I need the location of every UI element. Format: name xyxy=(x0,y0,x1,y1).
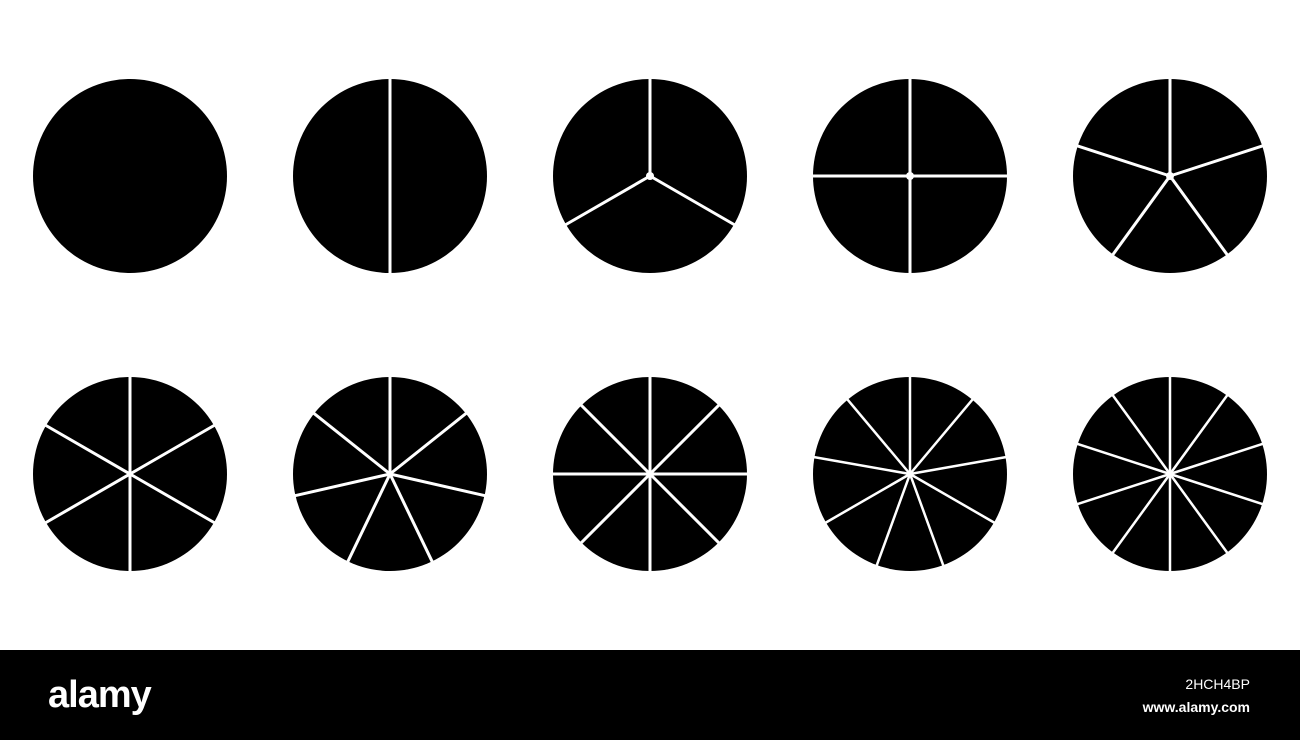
logo text: alamy xyxy=(48,674,152,716)
image id: 2HCH4BP xyxy=(1185,676,1250,692)
pie: 3 segments xyxy=(553,78,747,273)
pie: 10 segments xyxy=(1073,376,1267,572)
pie: 1 segment xyxy=(33,79,227,273)
pie: 9 segments xyxy=(813,376,1007,571)
pie: 7 segments xyxy=(293,376,487,571)
pie: 5 segments xyxy=(1073,78,1267,273)
pie: 4 segments xyxy=(812,78,1008,274)
pie: 2 segments xyxy=(293,78,487,274)
footer bar xyxy=(0,650,1300,740)
pie: 6 segments xyxy=(33,376,227,572)
pie: 8 segments xyxy=(552,376,748,572)
website: www.alamy.com xyxy=(1142,699,1250,715)
